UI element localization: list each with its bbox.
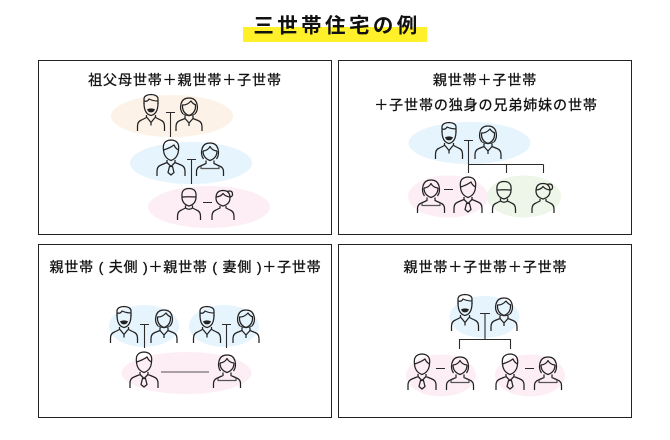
parent household <box>450 294 520 338</box>
connectors <box>140 324 231 348</box>
single siblings <box>487 176 561 218</box>
second child household <box>495 354 565 396</box>
panel: grandparents + parents + children <box>38 60 332 234</box>
parent household <box>130 140 252 184</box>
parent household <box>408 122 530 164</box>
grandparent household <box>111 94 233 137</box>
connectors <box>436 314 534 368</box>
panel: parents + two child households <box>338 244 632 418</box>
panel heading: ＋子世帯の独身の兄弟姉妹の世帯 <box>374 97 598 113</box>
panel heading: 親世帯 ( 夫側 )＋親世帯 ( 妻側 )＋子世帯 <box>50 259 322 275</box>
husband's parents <box>109 305 179 347</box>
title: 三世帯住宅の例 <box>253 14 421 38</box>
panel: husband's parents + wife's parents + children <box>38 244 332 418</box>
connectors <box>166 112 212 202</box>
child household <box>408 176 488 218</box>
panel heading: 親世帯＋子世帯 <box>433 72 537 88</box>
panel heading: 祖父母世帯＋親世帯＋子世帯 <box>88 72 282 88</box>
wife's parents <box>189 305 259 347</box>
panel: parents + children + single siblings <box>338 60 632 234</box>
first child household <box>406 354 476 396</box>
panel heading <box>374 72 598 113</box>
child household <box>148 186 270 228</box>
child household <box>122 352 252 394</box>
connectors <box>444 140 544 190</box>
panel heading: 親世帯＋子世帯＋子世帯 <box>404 259 567 275</box>
